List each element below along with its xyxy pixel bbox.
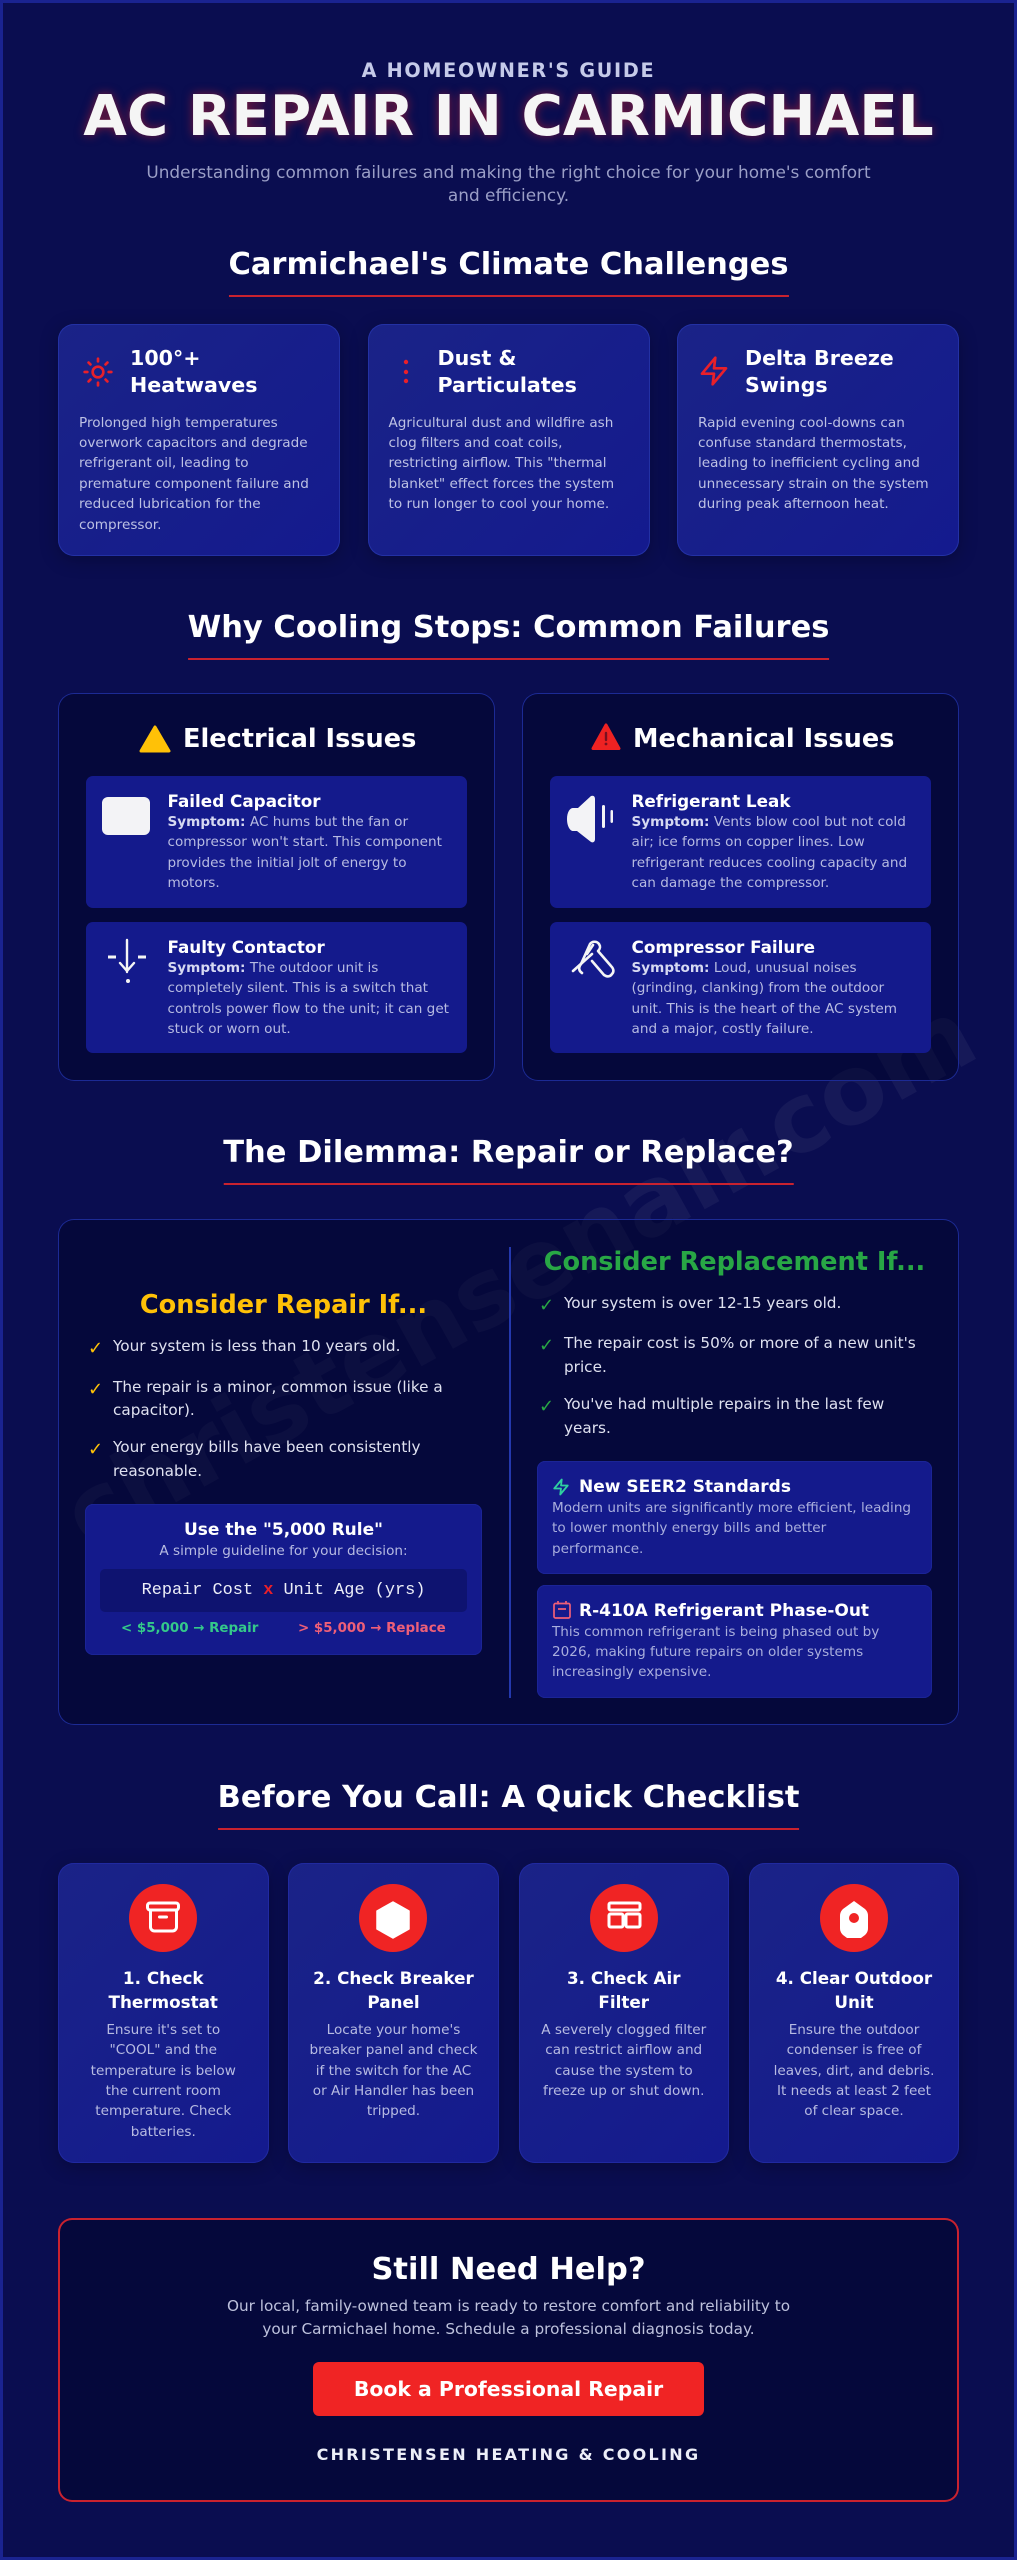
check item: You've had multiple repairs in the last few xyxy=(564,1395,884,1413)
callout title: R-410A Refrigerant Phase-Out xyxy=(579,1601,869,1621)
step text: Ensure it's set to xyxy=(106,2022,220,2038)
step text xyxy=(774,2022,934,2119)
step title xyxy=(313,1968,474,2012)
step title: 2. Check Breaker xyxy=(313,1968,474,1988)
button: Book a Professional Repair xyxy=(354,2377,663,2401)
item text: Symptom: Loud, unusual noises xyxy=(632,960,857,976)
item: refrigerant leak xyxy=(550,776,931,908)
card text xyxy=(79,414,309,533)
panel: heatwaves xyxy=(58,324,340,556)
heading: checklist: Before You Call: A Quick Checklist xyxy=(218,1780,799,1814)
step title: Panel xyxy=(367,1992,420,2012)
check item xyxy=(539,1334,916,1376)
check item: ✓ xyxy=(88,1338,103,1359)
step text: Ensure the outdoor xyxy=(789,2022,919,2038)
callout text: This common refrigerant is being phased out by xyxy=(552,1624,879,1640)
step text: of clear space. xyxy=(804,2103,904,2119)
formula xyxy=(100,1569,467,1612)
CTA text: Our local, family-owned team is ready to restore comfort and reliability to xyxy=(227,2296,790,2314)
step title: 1. Check xyxy=(123,1968,204,1988)
step title xyxy=(108,1968,218,2012)
step title: 3. Check Air xyxy=(567,1968,680,1988)
callout text: 2026, making future repairs on older systems xyxy=(552,1644,863,1660)
rule title: Use the "5,000 Rule" xyxy=(184,1520,383,1540)
step text xyxy=(91,2022,236,2140)
callout title: New SEER2 Standards xyxy=(579,1477,791,1497)
card title: Delta Breeze xyxy=(745,346,894,370)
button xyxy=(313,2362,704,2416)
step text: condenser is free of xyxy=(787,2042,921,2058)
check item: Your system is less than 10 years old. xyxy=(113,1337,400,1355)
card text: premature component failure and xyxy=(79,476,309,492)
main title: AC REPAIR IN CARMICHAEL xyxy=(83,84,934,148)
step text: batteries. xyxy=(131,2124,196,2140)
card title: 100°+ xyxy=(130,346,201,370)
step text: breaker panel and check xyxy=(309,2042,478,2058)
item text: motors. xyxy=(168,875,220,891)
item: compressor failure xyxy=(550,922,931,1053)
icon: outdoor unit xyxy=(820,1884,888,1952)
panel heading: Mechanical Issues xyxy=(633,724,894,754)
check item: reasonable. xyxy=(113,1462,202,1480)
rule outcome: replace: > $5,000 → Replace xyxy=(298,1621,446,1636)
check item xyxy=(88,1438,421,1480)
card text: Agricultural dust and wildfire ash xyxy=(388,414,613,430)
subtitle: Understanding common failures and making the right choice for your home's comfort xyxy=(146,162,871,182)
item text xyxy=(168,937,449,1037)
brand: CHRISTENSEN HEATING & COOLING xyxy=(317,2445,700,2464)
item: faulty contactor xyxy=(86,922,467,1053)
icon: bolt xyxy=(553,1478,569,1496)
check item: price. xyxy=(564,1358,607,1376)
replacement heading: Consider Replacement If... xyxy=(544,1247,925,1277)
check item: The repair cost is 50% or more of a new unit's xyxy=(564,1334,916,1352)
item text: provides the initial jolt of energy to xyxy=(168,855,407,871)
step title: 4. Clear Outdoor xyxy=(776,1968,932,1988)
check item: ✓ xyxy=(539,1335,554,1356)
panel: step 3 xyxy=(518,1863,729,2163)
panel: repair or replace xyxy=(58,1219,959,1725)
heading: common failures xyxy=(188,608,829,660)
check item: ✓ xyxy=(539,1396,554,1417)
step title: Thermostat xyxy=(109,1992,218,2012)
step text: leaves, dirt, and debris. xyxy=(774,2063,934,2079)
replacement list xyxy=(539,1294,916,1437)
icon: zap xyxy=(700,356,728,386)
step text: freeze up or shut down. xyxy=(543,2083,704,2099)
callout text xyxy=(552,1500,911,1556)
kicker: A HOMEOWNER'S GUIDE xyxy=(362,59,655,82)
item text xyxy=(632,937,897,1037)
card title: Swings xyxy=(745,373,828,397)
formula: Repair Cost x Unit Age (yrs) xyxy=(142,1581,425,1600)
card text: unnecessary strain on the system xyxy=(698,476,929,492)
item text: (grinding, clanking) from the outdoor xyxy=(632,980,884,996)
rule outcome: repair: < $5,000 → Repair xyxy=(121,1621,258,1636)
card title xyxy=(745,346,894,397)
icon: calendar xyxy=(553,1601,571,1619)
card title xyxy=(438,346,577,397)
heading: common failures: Why Cooling Stops: Common Failures xyxy=(188,610,829,644)
step title: Unit xyxy=(834,1992,874,2012)
card text: reduced lubrication for the xyxy=(79,496,261,512)
step title xyxy=(567,1968,680,2012)
panel: step 2 xyxy=(288,1863,499,2163)
card text xyxy=(698,414,929,512)
item text: Symptom: Vents blow cool but not cold xyxy=(632,814,906,830)
icon: thermostat box xyxy=(129,1884,197,1952)
card title: Heatwaves xyxy=(130,373,258,397)
check item: ✓ xyxy=(88,1439,103,1460)
CTA text xyxy=(58,2294,959,2341)
item text: completely silent. This is a switch that xyxy=(168,980,428,996)
card text: to run longer to cool your home. xyxy=(388,496,609,512)
panel: step 4 xyxy=(749,1863,959,2163)
card title: Particulates xyxy=(438,373,577,397)
card text: Rapid evening cool-downs can xyxy=(698,414,905,430)
icon: capacitor xyxy=(102,797,150,835)
icon: dots xyxy=(404,360,408,384)
step text xyxy=(309,2022,478,2119)
CTA title: Still Need Help? xyxy=(371,2252,646,2287)
step text: Locate your home's xyxy=(327,2022,460,2038)
heading: checklist xyxy=(218,1778,799,1830)
step text: the current room xyxy=(106,2083,221,2099)
check item: Your energy bills have been consistently xyxy=(113,1438,421,1456)
subtitle: and efficiency. xyxy=(448,185,569,205)
card title xyxy=(130,346,258,397)
item text xyxy=(632,791,907,891)
item text xyxy=(168,791,442,891)
card text xyxy=(388,414,614,512)
step text: A severely clogged filter xyxy=(541,2022,706,2038)
step text: tripped. xyxy=(367,2103,420,2119)
card text: blanket" effect forces the system xyxy=(388,476,614,492)
item text: Compressor Failure xyxy=(632,937,815,957)
step title xyxy=(776,1968,932,2012)
callout: SEER2 xyxy=(537,1461,932,1574)
CTA text: your Carmichael home. Schedule a professional diagnosis today. xyxy=(262,2320,755,2338)
icon: hexagon xyxy=(359,1884,427,1952)
icon: contactor xyxy=(108,938,146,983)
card text: clog filters and coat coils, xyxy=(388,435,562,451)
icon: red warning triangle xyxy=(592,723,621,750)
card text: leading to inefficient cycling and xyxy=(698,455,920,471)
item text: Faulty Contactor xyxy=(168,937,325,957)
check item: ✓ xyxy=(539,1295,554,1316)
repair list xyxy=(88,1337,443,1480)
panel: electrical issues xyxy=(58,693,495,1081)
item text: air; ice forms on copper lines. Low xyxy=(632,834,865,850)
step text: or Air Handler has been xyxy=(313,2083,474,2099)
callout text: increasingly expensive. xyxy=(552,1664,711,1680)
card text: overwork capacitors and degrade xyxy=(79,435,308,451)
step text: cause the system to xyxy=(555,2063,693,2079)
callout text: performance. xyxy=(552,1540,643,1556)
check item: years. xyxy=(564,1419,611,1437)
card text: compressor. xyxy=(79,517,161,533)
card text: confuse standard thermostats, xyxy=(698,435,907,451)
divider xyxy=(509,1246,511,1698)
item text: controls power flow to the unit; it can get xyxy=(168,1001,449,1017)
watermark: christensenair.com xyxy=(44,977,993,1571)
panel: step 1 xyxy=(58,1863,268,2163)
check item: The repair is a minor, common issue (like a xyxy=(113,1378,443,1396)
panel: call to action xyxy=(58,2218,959,2502)
panel heading: Electrical Issues xyxy=(183,724,416,754)
callout text xyxy=(552,1624,879,1680)
panel: mechanical issues xyxy=(522,693,959,1081)
subtitle xyxy=(146,162,871,205)
step text xyxy=(541,2022,706,2099)
card text: refrigerant oil, leading to xyxy=(79,455,249,471)
card title: Dust & xyxy=(438,346,516,370)
heading: dilemma: The Dilemma: Repair or Replace? xyxy=(223,1135,794,1170)
item text: compressor won't start. This component xyxy=(168,834,442,850)
icon: speaker xyxy=(567,796,613,842)
step title: Filter xyxy=(598,1992,649,2012)
icon: wrench xyxy=(572,940,615,978)
step text: "COOL" and the xyxy=(110,2042,217,2058)
item text: Symptom: The outdoor unit is xyxy=(168,960,378,976)
heading: climate challenges xyxy=(228,245,789,297)
rule subtitle: A simple guideline for your decision: xyxy=(159,1543,408,1559)
callout: R-410A xyxy=(537,1585,932,1698)
panel: delta breeze xyxy=(677,324,959,556)
callout text: to lower monthly energy bills and better xyxy=(552,1520,826,1536)
item text: unit. This is the heart of the AC system xyxy=(632,1001,897,1017)
icon: yellow warning triangle xyxy=(140,725,171,752)
step text: temperature is below xyxy=(91,2063,236,2079)
card text: Prolonged high temperatures xyxy=(79,414,278,430)
item text: refrigerant reduces cooling capacity and xyxy=(632,855,907,871)
icon: sun xyxy=(83,357,113,387)
step text: It needs at least 2 feet xyxy=(777,2083,931,2099)
heading: climate challenges: Carmichael's Climate Challenges xyxy=(228,247,789,282)
item text: Refrigerant Leak xyxy=(632,791,790,811)
check item xyxy=(539,1395,884,1437)
step text: if the switch for the AC xyxy=(316,2063,471,2079)
item text: stuck or worn out. xyxy=(168,1021,291,1037)
icon: filter layout xyxy=(590,1884,658,1952)
heading: dilemma xyxy=(223,1133,794,1185)
item text: and a major, costly failure. xyxy=(632,1021,814,1037)
step text: temperature. Check xyxy=(95,2103,231,2119)
item text: can damage the compressor. xyxy=(632,875,829,891)
panel: dust xyxy=(368,324,650,556)
callout text: Modern units are significantly more efficient, leading xyxy=(552,1500,911,1516)
header xyxy=(79,59,938,205)
item: failed capacitor xyxy=(86,776,467,908)
item text: Symptom: AC hums but the fan or xyxy=(168,814,408,830)
check item: capacitor). xyxy=(113,1401,195,1419)
card text: during peak afternoon heat. xyxy=(698,496,889,512)
check item: ✓ xyxy=(88,1378,103,1400)
card text: restricting airflow. This "thermal xyxy=(388,455,607,471)
check item: Your system is over 12-15 years old. xyxy=(564,1294,841,1312)
step text: can restrict airflow and xyxy=(545,2042,702,2058)
item text: Failed Capacitor xyxy=(168,791,321,811)
callout: 5000 rule xyxy=(85,1504,482,1654)
repair heading: Consider Repair If... xyxy=(140,1290,427,1320)
check item xyxy=(88,1378,443,1419)
